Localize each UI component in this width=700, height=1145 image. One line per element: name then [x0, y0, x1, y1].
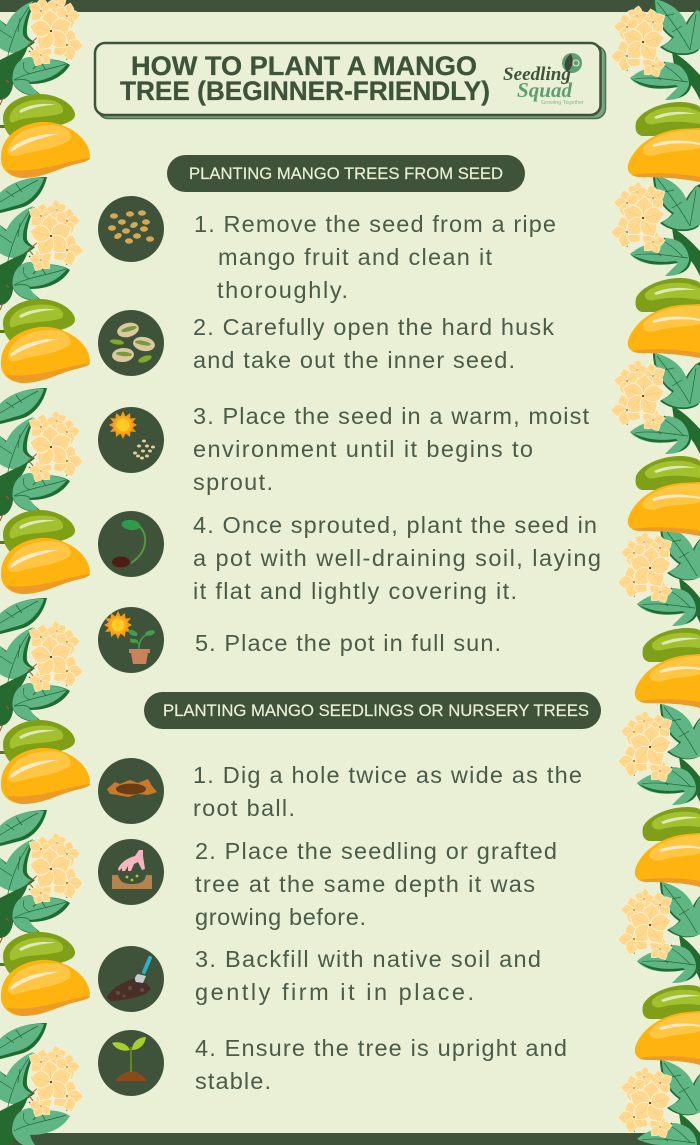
right decorative border: leaves, flowers and mangoes [605, 0, 700, 1145]
step text: upright and stable: stable. [195, 1068, 271, 1094]
top bar [0, 0, 700, 12]
step text: backfill: 3. Backfill with native soil and [195, 946, 541, 972]
step text: upright and stable [195, 1035, 567, 1094]
step text: open the husk [193, 314, 554, 373]
bottom bar [0, 1133, 700, 1145]
step text: dig a hole [193, 762, 582, 821]
icon: pistachio husks [98, 310, 164, 376]
icon: sapling on mound [98, 1030, 164, 1096]
logo: Seedling Squad: Squad [517, 78, 573, 102]
icon: potted plant in the sun [98, 607, 164, 673]
step text: open the husk: 2. Carefully open the hard husk [193, 314, 554, 340]
title text: TREE (BEGINNER-FRIENDLY) [120, 76, 490, 106]
step text: warm moist environment: 3. Place the seed in a warm, moist [193, 403, 589, 429]
logo: Seedling Squad [503, 53, 584, 106]
step text: backfill [195, 946, 541, 1005]
left decorative border: leaves, flowers and mangoes [0, 0, 90, 1145]
step text: remove the seed: thoroughly. [217, 277, 348, 303]
icon: trowel and soil [98, 946, 164, 1012]
step text: warm moist environment [193, 403, 589, 495]
step text: remove the seed: mango fruit and clean it [218, 244, 492, 270]
icon: sun and seeds [98, 407, 164, 473]
step text: plant sprouted seed [193, 512, 601, 604]
title text [120, 51, 490, 106]
step text: place the seedling: growing before. [195, 904, 366, 930]
section heading: seedlings or nursery trees: PLANTING MANGO SEEDLINGS OR NURSERY TREES [163, 702, 589, 720]
step text: place the seedling: tree at the same depth it was [195, 871, 535, 897]
step text: remove the seed: 1. Remove the seed from a ripe [194, 211, 556, 237]
step text: warm moist environment: environment until it begins to [193, 436, 533, 462]
step text: place in full sun: 5. Place the pot in full sun. [195, 630, 501, 656]
step text: open the husk: and take out the inner seed. [193, 347, 515, 373]
step text: place the seedling [195, 838, 557, 930]
step text: warm moist environment: sprout. [193, 469, 273, 495]
step text: plant sprouted seed: a pot with well-draining soil, laying [193, 545, 601, 571]
section heading: seedlings or nursery trees [144, 692, 601, 729]
icon: mango seeds [98, 196, 164, 262]
logo: Seedling Squad: Seedling [503, 64, 571, 85]
icon: hand placing seedling in soil [98, 839, 164, 905]
section heading: planting from seed: PLANTING MANGO TREES FROM SEED [189, 165, 503, 183]
icon: dug hole [98, 758, 164, 824]
step text: plant sprouted seed: it flat and lightly covering it. [193, 578, 517, 604]
title text: HOW TO PLANT A MANGO [131, 51, 477, 81]
step text: dig a hole: 1. Dig a hole twice as wide as the [193, 762, 582, 788]
step text: place the seedling: 2. Place the seedling or grafted [195, 838, 557, 864]
step text: plant sprouted seed: 4. Once sprouted, plant the seed in [193, 512, 597, 538]
step text: remove the seed [194, 211, 556, 303]
step text: upright and stable: 4. Ensure the tree is upright and [195, 1035, 567, 1061]
step text: backfill: gently firm it in place. [195, 979, 474, 1005]
title panel [95, 43, 606, 118]
step text: dig a hole: root ball. [193, 795, 295, 821]
logo: Seedling Squad: Growing Together [541, 100, 584, 106]
icon: sprouting seed [98, 511, 164, 577]
section heading: planting from seed [167, 155, 525, 192]
